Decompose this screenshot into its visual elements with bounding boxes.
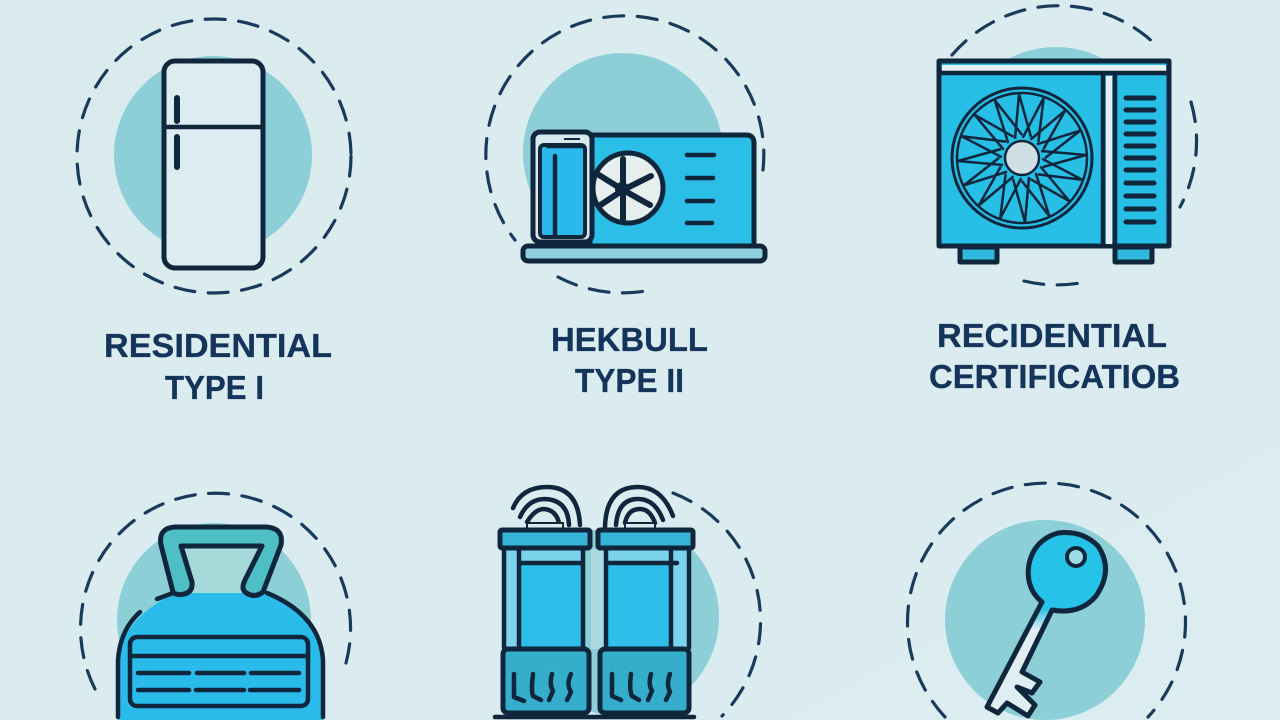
label: hekbull type II: TYPE II: [575, 362, 684, 399]
label: hekbull type II: HEKBULL: [551, 321, 708, 358]
icon: cylinder with handle: [118, 527, 323, 720]
label: residential type I: [104, 327, 332, 406]
label: residential type I: RESIDENTIAL: [104, 327, 332, 364]
icon: dashed ring 6: [908, 483, 1186, 717]
icon: outdoor AC unit: [939, 61, 1169, 262]
fan: [952, 88, 1092, 228]
teal disc 5: [585, 530, 719, 714]
panel: twin tanks: [495, 487, 761, 717]
icon: dashed ring 1: [77, 19, 351, 293]
label: residential type I: TYPE I: [165, 369, 264, 406]
icon: condenser unit with door and fan: [523, 132, 765, 261]
teal disc 1: [114, 56, 312, 254]
panel: residential type I: [77, 19, 351, 406]
icon: dashed ring 5: [673, 493, 761, 716]
icon: dashed ring 3: [952, 6, 1197, 285]
panel: recovery cylinder: [81, 493, 351, 720]
panel: key: [908, 483, 1186, 720]
teal disc 2: [523, 53, 723, 253]
icon: dashed ring 2: [486, 16, 764, 293]
icon: dashed ring 4: [81, 493, 351, 689]
label: recidential certification: [929, 317, 1180, 395]
icon: key: [987, 533, 1106, 716]
panel: hekbull type II: [486, 16, 765, 399]
teal disc 3: [956, 47, 1156, 247]
teal disc 6: [945, 520, 1145, 720]
teal disc 4: [117, 523, 311, 717]
icon: refrigerator: [164, 61, 263, 268]
panel: residential certification: [929, 6, 1197, 395]
icon: twin tanks with signal arcs: [495, 487, 694, 717]
label: recidential certification: RECIDENTIAL: [937, 317, 1167, 354]
label: hekbull type II: [551, 321, 708, 399]
label: recidential certification: CERTIFICATIOB: [929, 358, 1180, 395]
